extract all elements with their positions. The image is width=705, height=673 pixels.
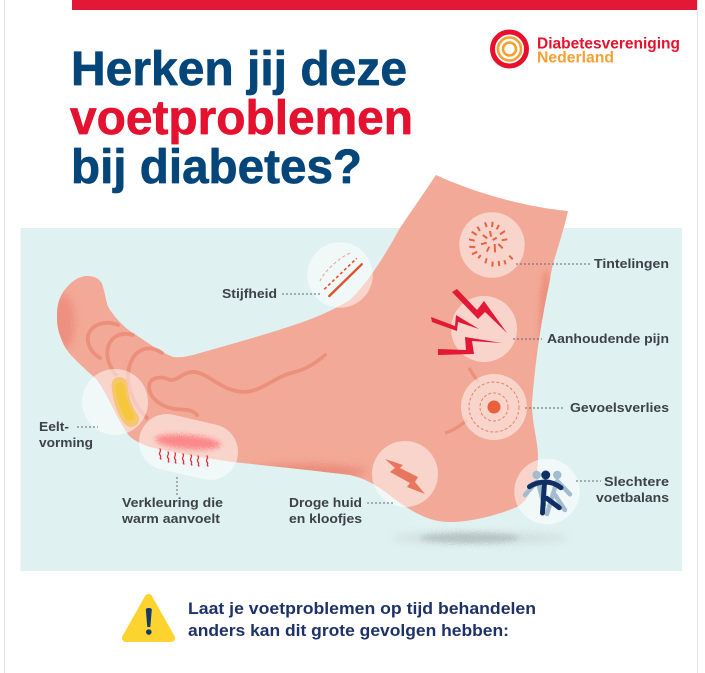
label: eeltvorming: Eelt- [39,419,69,434]
label: gevoelsverlies: Gevoelsverlies [570,400,669,415]
floor shadow [392,532,568,544]
tingling spot [459,212,525,278]
foot illustration [51,175,568,522]
logo [492,32,680,66]
label: eeltvorming [39,419,98,450]
callus spot [82,369,148,435]
label: droge huid en kloofjes [289,495,393,526]
title: bij diabetes? [71,141,362,194]
label: stijfheid: Stijfheid [222,286,277,301]
top red bar [72,0,697,10]
logo: Nederland [537,50,614,66]
label: verkleuring die warm aanvoelt: warm aanvoelt [121,511,221,526]
loss of feeling spot [461,374,527,440]
label: tintelingen: Tintelingen [594,256,669,271]
warning text: anders kan dit grote gevolgen hebben: [188,621,509,640]
warning text [188,599,536,640]
label: droge huid en kloofjes: en kloofjes [289,511,362,526]
title: voetproblemen [70,92,413,145]
discoloration spot [155,432,221,466]
label: verkleuring die warm aanvoelt [121,477,223,526]
label: verkleuring die warm aanvoelt: Verkleuring die [122,495,223,510]
label: slechtere voetbalans [576,474,669,505]
warning text: Laat je voetproblemen op tijd behandelen [188,599,536,618]
label: slechtere voetbalans: voetbalans [596,490,669,505]
persistent pain spot [431,289,517,362]
logo: Diabetesvereniging [537,36,680,52]
label: slechtere voetbalans: Slechtere [604,474,669,489]
balance spot [514,459,580,524]
light blue panel [20,228,682,571]
title: Herken jij deze [71,43,407,96]
icon: warning triangle [126,598,171,638]
title [70,43,413,194]
label: stijfheid [222,286,320,301]
stiffness spot [307,242,373,308]
label: aanhoudende pijn: Aanhoudende pijn [547,331,669,346]
label: droge huid en kloofjes: Droge huid [289,495,362,510]
label: eeltvorming: vorming [39,435,93,450]
dry skin spot [372,441,438,507]
